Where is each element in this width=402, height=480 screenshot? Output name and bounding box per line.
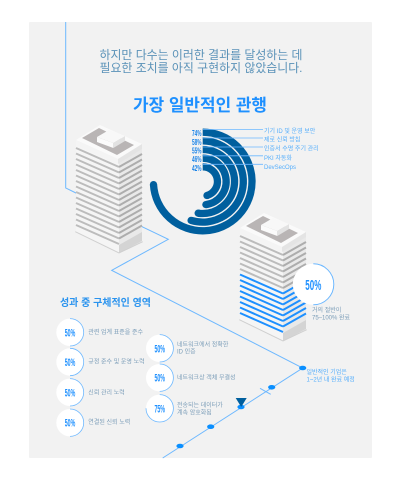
metric: data encryption 75%: 전송되는 데이터가	[177, 401, 223, 409]
metric: industry standards 50%: 50%	[65, 327, 75, 339]
callout: 50% nearly half complete: 50%	[305, 277, 321, 294]
metric: object integrity 50%: 50%	[154, 373, 165, 385]
metric: connected trust 50%: 연결된 신뢰 노력	[88, 418, 130, 426]
connector line: upper path	[66, 22, 303, 458]
radial bar chart: 42%	[192, 163, 202, 173]
metric: object integrity 50%: 네트워크상 객체 무결성	[177, 374, 236, 382]
metric: object integrity 50%	[146, 364, 236, 391]
radial bar chart: DevSecOps	[264, 165, 296, 171]
intro text: 하지만 다수는 이러한 결과를 달성하는 데	[100, 48, 302, 62]
radial bar chart: 58%	[192, 137, 202, 147]
panel: background	[29, 22, 372, 458]
metric: data encryption 75%: 계속 암호화됨	[177, 408, 212, 416]
intro text	[100, 48, 302, 75]
timeline note: 1~2년 내 완료 예정	[306, 376, 355, 384]
radial bar chart: 46%	[192, 154, 202, 164]
timeline note	[306, 368, 355, 384]
timeline dots	[176, 366, 306, 448]
metric: compliance 50%	[56, 348, 145, 376]
metric: network ID authentication 50%	[146, 335, 229, 362]
radial bar chart: 55%	[192, 146, 202, 156]
radial bar chart: 74%	[192, 128, 202, 138]
timeline note: 일반적인 기업은	[306, 368, 347, 376]
metric: connected trust 50%	[56, 409, 130, 436]
radial bar chart: 제로 신뢰 방침	[264, 136, 300, 144]
building: left grey tower	[75, 125, 143, 253]
metric: industry standards 50%	[56, 319, 143, 346]
metric: network ID authentication 50%: 네트워크에서 정확한	[177, 340, 229, 348]
callout: 50% nearly half complete: 거의 절반이	[312, 306, 341, 314]
callout: 50% nearly half complete	[293, 264, 351, 322]
radial bar chart	[150, 127, 319, 231]
radial bar chart: 인증서 수명 주기 관리	[264, 144, 319, 152]
metric: trust management 50%	[56, 379, 125, 406]
metric: data encryption 75%: 75%	[154, 403, 165, 415]
heading: most common practices: 가장 일반적인 관행	[133, 96, 267, 115]
timeline tick	[260, 388, 271, 394]
metric: compliance 50%: 규정 준수 및 운영 노력	[88, 358, 145, 366]
building: right tower half filled in blue	[239, 213, 307, 341]
callout: 50% nearly half complete: 75–100% 완료	[312, 314, 351, 322]
subheading: specific areas of achievement: 성과 중 구체적인 영역	[60, 296, 151, 309]
icon: timeline marker	[236, 398, 247, 407]
radial bar chart: 기기 ID 및 운영 보안	[264, 127, 316, 135]
metric: network ID authentication 50%: 50%	[154, 343, 165, 355]
metric: industry standards 50%: 관련 업계 표준을 준수	[88, 328, 143, 336]
metric: connected trust 50%: 50%	[65, 418, 75, 430]
intro text: 필요한 조치를 아직 구현하지 않았습니다.	[100, 61, 302, 75]
metric: data encryption 75%	[146, 395, 223, 422]
metric: trust management 50%: 신뢰 관리 노력	[88, 388, 125, 396]
metric: compliance 50%: 50%	[65, 357, 75, 369]
metric: network ID authentication 50%: ID 인증	[177, 348, 196, 356]
radial bar chart: PKI 자동화	[264, 154, 292, 162]
metric: trust management 50%: 50%	[65, 387, 75, 399]
